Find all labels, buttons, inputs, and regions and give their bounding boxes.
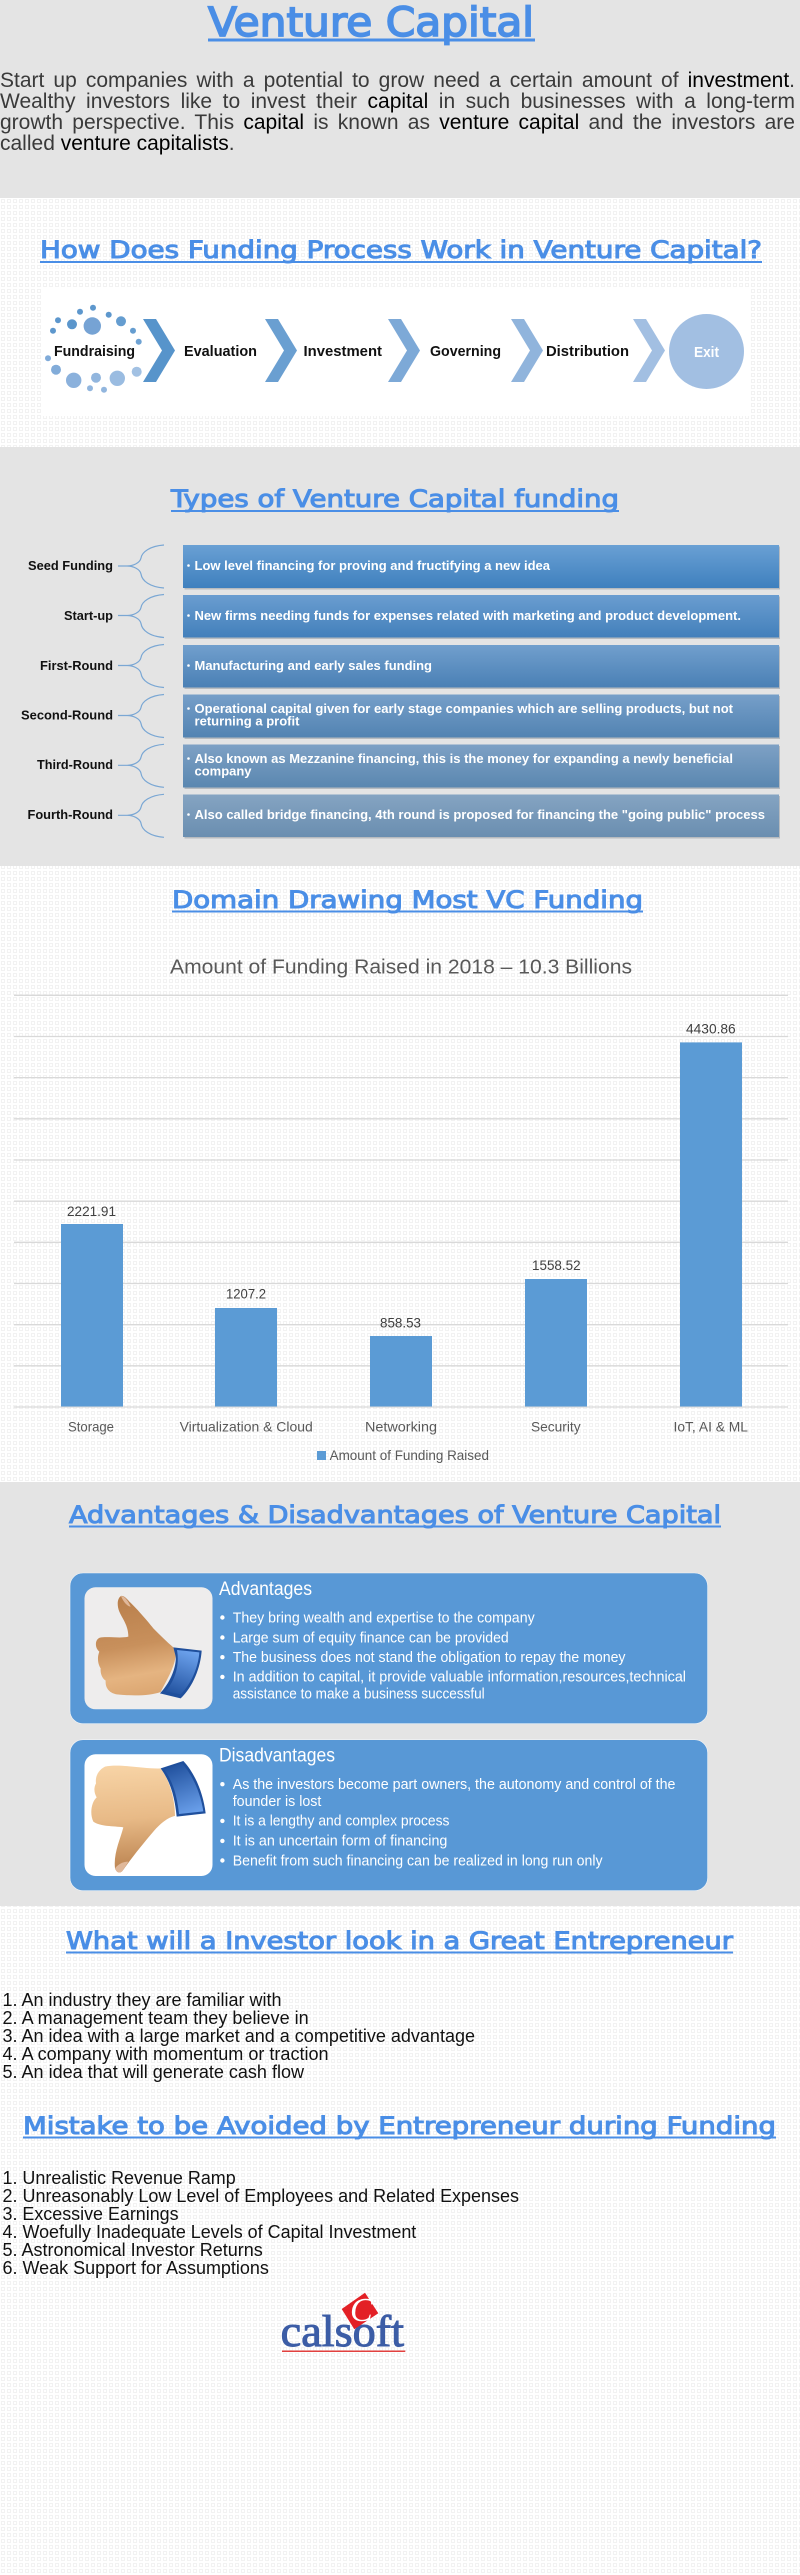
arrow 2 — [265, 319, 297, 382]
row: Seed Funding — [28, 545, 780, 590]
bar: Virtualization & Cloud: Virtualization & Cloud — [180, 1418, 313, 1434]
row: Third-Round — [37, 744, 780, 789]
list: investor criteria: 3. An idea with a large market and a competitive advantage — [2, 2026, 475, 2046]
row: Start-up — [64, 594, 780, 639]
advantages list: They bring wealth and expertise to the company — [233, 1609, 535, 1626]
bar: Virtualization & Cloud — [180, 1286, 313, 1434]
intro text block: called venture capitalists. — [0, 132, 235, 155]
advantages list: The business does not stand the obligation to repay the money — [233, 1649, 626, 1666]
arrow 5 — [633, 319, 665, 382]
heading: mistakes to avoid: Mistake to be Avoided by Entrepreneur during Funding — [23, 2112, 776, 2140]
heading: advantages and disadvantages: Advantages & Disadvantages of Venture Capital — [69, 1501, 721, 1529]
intro text block: Wealthy investors like to invest their capital in such businesses with a long-term — [0, 90, 795, 113]
bar: Networking: Networking — [365, 1418, 437, 1434]
bar chart: funding raised 2018 — [14, 956, 788, 1463]
bar: IoT, AI & ML — [674, 1020, 748, 1434]
bar: Networking: 858.53 — [380, 1314, 421, 1330]
step: Fundraising: Fundraising — [54, 343, 135, 360]
chart title: Amount of Funding Raised in 2018 – 10.3 Billions — [170, 956, 632, 978]
intro text block: growth perspective. This capital is known as venture capital and the investors are — [0, 111, 795, 134]
step: Distribution: Distribution — [546, 343, 629, 360]
bar: Networking — [365, 1314, 437, 1434]
panel: funding types — [21, 545, 780, 838]
row: First-Round — [40, 644, 780, 689]
step: Investment: Investment — [304, 343, 382, 360]
row: Fourth-Round: Fourth-Round — [28, 807, 113, 822]
row: Third-Round: Also known as Mezzanine financing, this is the money for expanding a newly beneficial — [194, 752, 733, 766]
row: Fourth-Round: Also called bridge financing, 4th round is proposed for financing the "going public" process — [194, 808, 765, 822]
advantages list: Large sum of equity finance can be provided — [233, 1629, 509, 1646]
list: mistakes: 2. Unreasonably Low Level of Employees and Related Expenses — [2, 2186, 519, 2206]
icon: thumbs up — [96, 1596, 202, 1698]
intro text block: Start up companies with a potential to grow need a certain amount of investment. — [0, 69, 795, 92]
bar: IoT, AI & ML: IoT, AI & ML — [674, 1418, 748, 1434]
icon: fundraising dot ring — [45, 305, 142, 393]
disadvantages list: As the investors become part owners, the autonomy and control of the — [233, 1776, 675, 1793]
row: Third-Round: company — [194, 764, 252, 778]
panel: funding process flow — [42, 288, 751, 416]
bar: IoT, AI & ML: 4430.86 — [686, 1020, 736, 1036]
logo: calsoft: C — [350, 2292, 373, 2329]
step: Exit — [669, 314, 744, 389]
arrow 3 — [388, 319, 420, 382]
row: Seed Funding: Low level financing for proving and fructifying a new idea — [194, 559, 551, 573]
bar: Virtualization & Cloud: 1207.2 — [226, 1286, 266, 1302]
disadvantages list — [220, 1776, 675, 1869]
heading: domain funding: Domain Drawing Most VC Funding — [172, 886, 643, 914]
row: Second-Round: Second-Round — [21, 708, 113, 722]
advantages heading: Advantages — [219, 1579, 312, 1600]
list: mistakes: 4. Woefully Inadequate Levels of Capital Investment — [2, 2222, 416, 2242]
list: mistakes: 3. Excessive Earnings — [2, 2204, 179, 2224]
legend: Amount of Funding Raised — [330, 1447, 489, 1463]
advantages list: In addition to capital, it provide valuable information,resources,technical — [233, 1669, 686, 1686]
step: Exit: Exit — [694, 344, 719, 361]
row: Third-Round: Third-Round — [37, 757, 113, 772]
list: investor criteria: 5. An idea that will generate cash flow — [2, 2062, 305, 2082]
arrow 4 — [511, 319, 543, 382]
row: Seed Funding: Seed Funding — [28, 558, 113, 573]
heading: investor criteria: What will a Investor look in a Great Entrepreneur — [66, 1927, 733, 1955]
bar: Storage: Storage — [68, 1418, 114, 1434]
advantages list: assistance to make a business successful — [233, 1686, 485, 1703]
panel: advantages — [70, 1573, 708, 1724]
disadvantages list: It is an uncertain form of financing — [233, 1833, 447, 1850]
list: investor criteria: 1. An industry they are familiar with — [2, 1990, 282, 2010]
disadvantages list: It is a lengthy and complex process — [233, 1813, 450, 1830]
row: Start-up: New firms needing funds for expenses related with marketing and product development. — [194, 609, 741, 623]
bar: Security: 1558.52 — [532, 1257, 581, 1273]
bar: Storage — [61, 1203, 123, 1434]
arrow 1 — [143, 319, 175, 382]
bar: Security: Security — [531, 1418, 581, 1434]
disadvantages list: founder is lost — [233, 1793, 322, 1810]
list: mistakes: 6. Weak Support for Assumptions — [2, 2258, 269, 2278]
row: Start-up: Start-up — [64, 608, 113, 623]
list: investor criteria: 2. A management team they believe in — [2, 2008, 309, 2028]
list: investor criteria — [2, 1990, 475, 2082]
step: Governing: Governing — [430, 343, 501, 360]
logo: calsoft: calsoft — [281, 2307, 404, 2356]
bar: Storage: 2221.91 — [67, 1203, 116, 1219]
step: Evaluation: Evaluation — [184, 343, 257, 360]
list: mistakes: 5. Astronomical Investor Returns — [2, 2240, 263, 2260]
list: mistakes — [2, 2168, 519, 2278]
list: investor criteria: 4. A company with momentum or traction — [2, 2044, 329, 2064]
row: Second-Round: returning a profit — [194, 714, 300, 728]
row: First-Round: Manufacturing and early sales funding — [194, 659, 432, 673]
advantages list — [220, 1609, 686, 1703]
panel: disadvantages — [70, 1740, 708, 1891]
heading: funding process: How Does Funding Process Work in Venture Capital? — [40, 236, 762, 264]
disadvantages list: Benefit from such financing can be realized in long run only — [233, 1852, 603, 1869]
icon: thumbs down — [91, 1761, 206, 1873]
row: Second-Round: Operational capital given for early stage companies which are selling products, but not — [194, 702, 734, 716]
row: Second-Round — [21, 694, 780, 739]
row: Fourth-Round — [28, 794, 780, 838]
row: First-Round: First-Round — [40, 658, 113, 673]
title: Venture Capital — [208, 0, 534, 46]
disadvantages heading: Disadvantages — [219, 1746, 335, 1767]
list: mistakes: 1. Unrealistic Revenue Ramp — [2, 2168, 236, 2188]
intro text block — [0, 69, 795, 155]
heading: types of funding: Types of Venture Capital funding — [170, 485, 619, 513]
bar: Security — [525, 1257, 587, 1434]
